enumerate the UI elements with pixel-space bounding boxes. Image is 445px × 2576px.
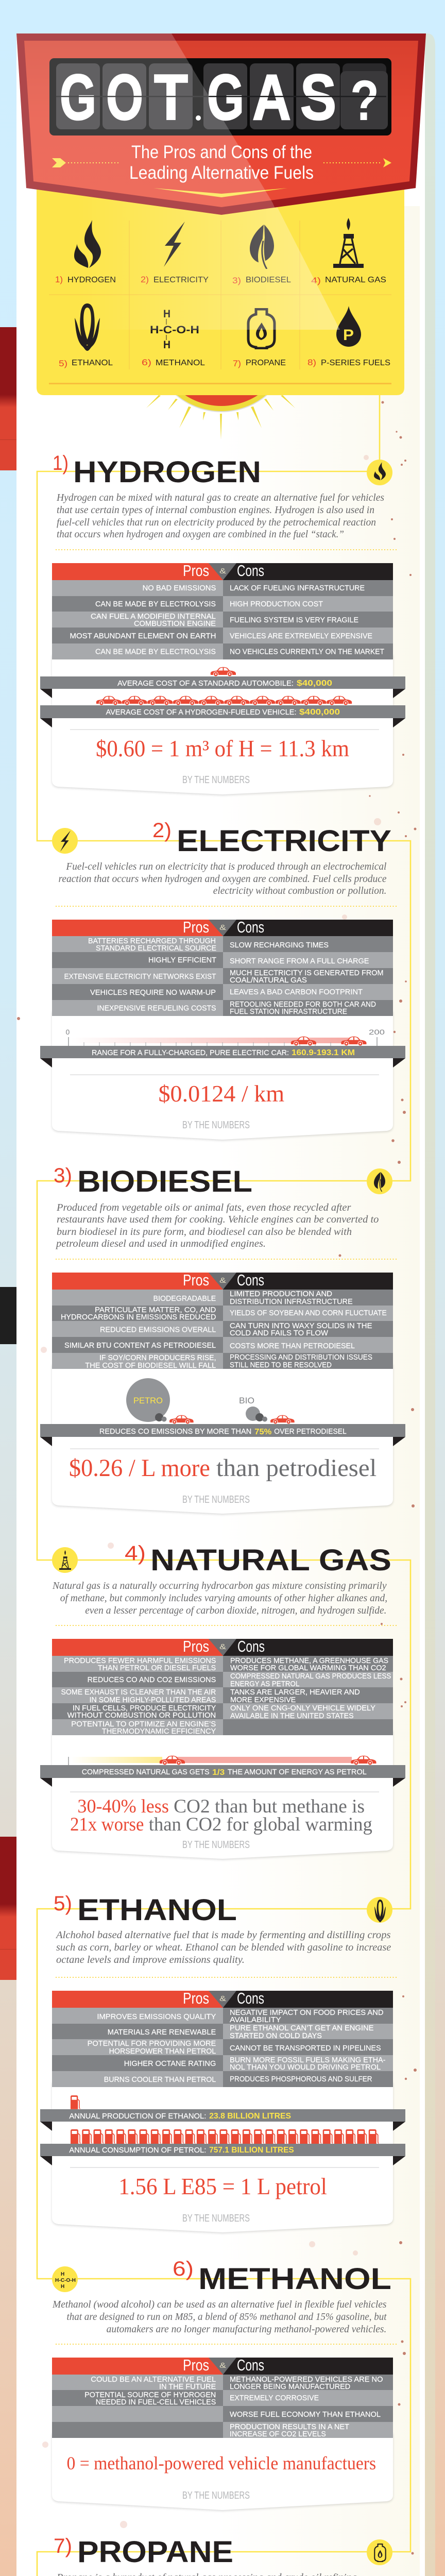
label: natural gas: 4) — [311, 276, 321, 285]
label: ethanol: 5) — [59, 359, 67, 368]
pros and cons table: CAN BE MADE BY ELECTROLYSIS — [95, 600, 216, 608]
label: biodiesel: 3) — [232, 276, 241, 285]
label: methanol: 6) — [142, 358, 151, 367]
pros and cons table: SOME EXHAUST IS CLEANER THAN THE AIR — [61, 1688, 216, 1697]
banner: standard automobile cost: $40,000 — [297, 679, 332, 688]
pros and cons table: SIMILAR BTU CONTENT AS PETRODIESEL — [64, 1342, 216, 1350]
pros and cons table: RETOOLING NEEDED FOR BOTH CAR AND — [230, 1001, 376, 1009]
pros and cons table: IN SOME HIGHLY-POLLUTED AREAS — [90, 1696, 216, 1704]
pros and cons table: PARTICULATE MATTER, CO, AND — [95, 1306, 216, 1314]
pros and cons table: BURN MORE FOSSIL FUELS MAKING ETHA- — [230, 2056, 386, 2064]
pros and cons table: PROCESSING AND DISTRIBUTION ISSUES — [230, 1353, 372, 1362]
energy range chart — [69, 1756, 376, 1765]
description: burn biodiesel in its pure form, and biodiesel can also be blended with — [57, 1226, 352, 1238]
ribbon: left black strip upper — [0, 1287, 16, 1344]
pros and cons table: NEEDED IN FUEL-CELL VEHICLES — [96, 2398, 216, 2406]
heading: ETHANOL — [77, 1893, 237, 1927]
banner: energy: THE AMOUNT OF ENERGY AS PETROL — [228, 1768, 367, 1776]
label: methanol — [142, 358, 205, 367]
description: reaction that occurs when hydrogen and oxygen are combined. Fuel cells produce — [59, 873, 387, 885]
pros and cons table: LIMITED PRODUCTION AND — [230, 1290, 332, 1298]
banner: energy — [40, 1765, 405, 1787]
sign board edge strip — [420, 33, 435, 2576]
pros and cons table: DISTRIBUTION INFRASTRUCTURE — [230, 1298, 353, 1306]
description: Alchohol based alternative fuel that is made by fermenting and distilling crops — [55, 1929, 391, 1941]
banner: hydrogen vehicle cost: $400,000 — [299, 708, 340, 717]
pros and cons table: STARTED ON COLD DAYS — [230, 2032, 322, 2040]
pros and cons table: WITHOUT COMBUSTION OR POLLUTION — [67, 1711, 216, 1720]
big stat: $0.26 / L more — [69, 1454, 210, 1482]
pros and cons table: REDUCES CO AND CO2 EMISSIONS — [88, 1676, 216, 1684]
flip board title — [49, 58, 391, 135]
ribbon: left red strip lower — [0, 1837, 16, 1980]
pros and cons table: & — [219, 1276, 226, 1285]
pros and cons table — [52, 1637, 393, 1736]
heading: 2) — [152, 819, 172, 842]
pros and cons table: AVAILABLE IN THE UNITED STATES — [230, 1712, 354, 1720]
pros and cons table: LONGER BEING MANUFACTURED — [230, 2383, 350, 2391]
pros and cons table: FUEL STATION INFRASTRUCTURE — [230, 1008, 347, 1016]
banner: ethanol production: ANNUAL PRODUCTION OF ETHANOL: — [69, 2112, 206, 2121]
banner: ethanol production — [40, 2109, 405, 2131]
pros and cons table: HIGHLY EFFICIENT — [148, 956, 216, 964]
description: that occurs when hydrogen and oxygen are combined in the fuel “stack.” — [57, 529, 344, 540]
section 5: ethanol — [40, 1892, 405, 2232]
pros and cons table: IN THE FUTURE — [159, 2383, 216, 2391]
big stat: 1.56 L E85 = 1 L petrol — [118, 2173, 327, 2199]
stats card — [52, 1011, 393, 1140]
description: Natural gas is a naturally occurring hydrocarbon gas mixture consisting primarily — [52, 1580, 387, 1591]
banner: range — [40, 1046, 405, 1067]
pros and cons table: INCREASE OF CO2 LEVELS — [230, 2430, 326, 2438]
heading: PROPANE — [77, 2535, 233, 2569]
pros and cons table — [52, 562, 393, 659]
label: propane: PROPANE — [246, 359, 286, 367]
heading: 4) — [125, 1542, 146, 1565]
car icon: standard — [211, 667, 236, 676]
range chart: 200 — [369, 1028, 385, 1036]
emissions bubble chart — [126, 1378, 295, 1424]
pros and cons table: INEXPENSIVE REFUELING COSTS — [97, 1005, 216, 1013]
pros and cons table: BURNS COOLER THAN PETROL — [104, 2076, 216, 2084]
pros and cons table: CANNOT BE TRANSPORTED IN PIPELINES — [230, 2044, 381, 2053]
icon: p-series drop — [336, 306, 361, 347]
heading: 3) — [54, 1164, 72, 1187]
banner: emissions: 75% — [254, 1428, 272, 1436]
label: electricity: 2) — [141, 275, 149, 284]
pros and cons table: LEAVES A BAD CARBON FOOTPRINT — [230, 988, 363, 996]
description: such as corn, barley or wheat. Ethanol can be blended with gasoline to increase — [56, 1942, 391, 1953]
sign glare — [16, 33, 278, 215]
pros and cons table: COMPRESSED NATURAL GAS PRODUCES LESS — [230, 1672, 391, 1681]
big stat: 30-40% less — [77, 1796, 169, 1817]
description: restaurants have used them for cooking. Vehicle engines can be converted to — [57, 1214, 379, 1225]
label: hydrogen: HYDROGEN — [67, 276, 116, 284]
banner: standard automobile cost — [40, 676, 405, 698]
label: ethanol: ETHANOL — [72, 359, 113, 367]
label: hydrogen — [55, 275, 116, 284]
section 1: hydrogen — [40, 452, 405, 794]
pros and cons table: HIGH PRODUCTION COST — [230, 600, 323, 608]
description: of methane, but commonly includes varying amounts of other higher alkanes and, — [60, 1592, 387, 1604]
description — [52, 2299, 387, 2335]
heading: BIODIESEL — [77, 1165, 252, 1198]
icon badge: leaf — [367, 1168, 392, 1194]
car icons: ten cars — [96, 696, 352, 705]
by the numbers label: BY THE NUMBERS — [182, 774, 250, 786]
icon badge: formula: H — [61, 2272, 64, 2277]
description — [55, 1202, 379, 1249]
pros and cons table: NEGATIVE IMPACT ON FOOD PRICES AND — [230, 2009, 384, 2017]
heading: NATURAL GAS — [150, 1544, 391, 1577]
icon: ethanol corn — [75, 303, 100, 351]
pros and cons table: THERMODYNAMIC EFFICIENCY — [102, 1727, 216, 1736]
by the numbers label: BY THE NUMBERS — [182, 2490, 250, 2501]
pros and cons table: Cons — [237, 1271, 264, 1289]
flip board title: T — [154, 62, 188, 133]
heading: 7) — [54, 2535, 72, 2557]
pros and cons table: COLD AND FAILS TO FLOW — [230, 1329, 328, 1337]
flip board title: ? — [350, 69, 379, 132]
icons: row of fuel pumps — [70, 2129, 379, 2144]
icon: hydrogen flame — [74, 220, 101, 268]
right arrow and dots — [323, 158, 391, 167]
section 7: propane — [52, 2535, 397, 2576]
pros and cons table: Pros — [183, 1989, 209, 2007]
big stat: $0.60 = 1 m³ of H = 11.3 km — [96, 735, 349, 761]
banner: emissions: OVER PETRODIESEL — [274, 1428, 347, 1436]
pros and cons table: THE COST OF BIODIESEL WILL FALL — [85, 1362, 216, 1370]
icon: fuel pump — [71, 2095, 80, 2109]
pros and cons table: PRODUCES FEWER HARMFUL EMISSIONS — [64, 1657, 216, 1665]
pros and cons table: MATERIALS ARE RENEWABLE — [108, 2028, 216, 2037]
pros and cons table: LACK OF FUELING INFRASTRUCTURE — [230, 584, 365, 592]
stats card — [52, 1364, 393, 1514]
pros and cons table: YIELDS OF SOYBEAN AND CORN FLUCTUATE — [230, 1309, 387, 1317]
label: propane: 7) — [233, 359, 241, 368]
heading: 6) — [173, 2258, 194, 2280]
icon badge: formula: H — [61, 2284, 64, 2290]
pros and cons table: MUCH ELECTRICITY IS GENERATED FROM — [230, 969, 384, 977]
label: p-series fuels: P-SERIES FUELS — [321, 359, 390, 367]
label: natural gas — [311, 276, 386, 285]
description: Methanol (wood alcohol) can be used as an alternative fuel in flexible fuel vehicles — [52, 2299, 387, 2310]
section 6: methanol — [52, 2258, 397, 2510]
sun motif under menu panel — [146, 271, 295, 439]
banner: energy: 1/3 — [212, 1768, 225, 1777]
big stat: 0 = methanol-powered vehicle manufactuers — [67, 2453, 376, 2473]
banner: range: 160.9-193.1 KM — [292, 1048, 355, 1057]
pros and cons table: MORE EXPENSIVE — [230, 1696, 296, 1704]
pros and cons table: BIODEGRADABLE — [153, 1295, 216, 1303]
pros and cons table: IF SOY/CORN PRODUCERS RISE, — [99, 1354, 216, 1362]
pros and cons table: VEHICLES REQUIRE NO WARM-UP — [90, 989, 216, 997]
pros and cons table: SLOW RECHARGING TIMES — [230, 941, 329, 950]
pros and cons table: COMBUSTION ENGINE — [134, 620, 216, 628]
icon: p-series drop: P — [343, 327, 354, 344]
by the numbers label: BY THE NUMBERS — [182, 1494, 250, 1505]
banner: hydrogen vehicle cost: AVERAGE COST OF A HYDROGEN-FUELED VEHICLE: — [106, 708, 297, 717]
description: automakers are no longer manufacturing methanol-powered vehicles. — [107, 2324, 386, 2335]
description — [59, 861, 387, 896]
banner: ethanol production: 23.8 BILLION LITRES — [209, 2112, 291, 2121]
label: p-series fuels: 8) — [307, 358, 316, 367]
description: octane levels and improve emissions quality. — [56, 1954, 245, 1965]
big stat: than petrodiesel — [216, 1454, 376, 1482]
description: petroleum diesel and used in unmodified engines. — [55, 1238, 266, 1249]
pros and cons table: Pros — [183, 562, 209, 580]
big stat — [69, 1454, 376, 1482]
description — [55, 1929, 391, 1965]
label: propane — [233, 359, 286, 368]
pros and cons table: WORSE FOR GLOBAL WARMING THAN CO2 — [230, 1664, 386, 1672]
flip board title: S — [300, 62, 336, 133]
pros and cons table: ENERGY AS PETROL — [230, 1680, 299, 1688]
pros and cons table — [52, 1271, 393, 1370]
pros and cons table: Cons — [237, 1637, 265, 1655]
banner: energy: COMPRESSED NATURAL GAS GETS — [82, 1768, 210, 1776]
pros and cons table: PRODUCTION RESULTS IN A NET — [230, 2423, 349, 2431]
pros and cons table: TANKS ARE LARGER, HEAVIER AND — [230, 1688, 360, 1697]
pros and cons table: Pros — [183, 1637, 209, 1655]
icon: natural gas rig — [333, 218, 364, 268]
pros and cons table — [52, 1989, 393, 2087]
icon badge: tank — [367, 2539, 392, 2565]
pros and cons table: CAN BE MADE BY ELECTROLYSIS — [95, 648, 216, 656]
pros and cons table: POTENTIAL TO OPTIMIZE AN ENGINE’S — [71, 1720, 216, 1728]
pros and cons table: NOL THAN YOU WOULD DRIVING PETROL — [230, 2063, 381, 2072]
pros and cons table: EXTREMELY CORROSIVE — [230, 2394, 319, 2402]
by the numbers label: BY THE NUMBERS — [182, 1120, 250, 1131]
icon badge: formula: H-C-O-H — [55, 2278, 76, 2283]
stats card — [52, 654, 393, 794]
banner: petrol consumption — [40, 2144, 405, 2165]
section 3: biodiesel — [40, 1164, 405, 1514]
pros and cons table: ONLY ONE CNG-ONLY VEHICLE WIDELY — [230, 1704, 375, 1713]
flip board title: A — [252, 62, 291, 133]
pros and cons table: STANDARD ELECTRICAL SOURCE — [96, 944, 216, 953]
pros and cons table: COSTS MORE THAN PETRODIESEL — [230, 1342, 355, 1350]
pros and cons table: COAL/NATURAL GAS — [230, 976, 307, 985]
pros and cons table: METHANOL-POWERED VEHICLES ARE NO — [230, 2376, 383, 2384]
heading: 5) — [54, 1892, 72, 1915]
icon badge: flame — [367, 460, 392, 485]
description: Produced from vegetable oils or animal fats, even those recycled after — [56, 1202, 351, 1213]
pros and cons table: Pros — [183, 2356, 209, 2374]
pros and cons table: & — [219, 567, 226, 575]
emissions bubble chart: BIO — [239, 1396, 254, 1405]
banner: emissions — [40, 1424, 405, 1446]
pale paper stains — [41, 455, 381, 2576]
swoosh — [153, 188, 287, 197]
big stat: 21x worse — [70, 1814, 144, 1835]
pros and cons table: Pros — [183, 1271, 209, 1289]
panel: fuel menu — [37, 185, 404, 395]
connecting yellow rail line — [37, 395, 410, 2576]
pros and cons table: MOST ABUNDANT ELEMENT ON EARTH — [70, 632, 216, 640]
heading: HYDROGEN — [73, 455, 261, 489]
pros and cons table: COULD BE AN ALTERNATIVE FUEL — [91, 2376, 216, 2384]
header sign — [16, 33, 426, 215]
pros and cons table: CAN FUEL A MODIFIED INTERNAL — [91, 613, 216, 621]
panel glare — [37, 190, 340, 330]
subtitle: Leading Alternative Fuels — [129, 163, 314, 183]
label: biodiesel — [232, 276, 291, 285]
pros and cons table: THAN PETROL OR DIESEL FUELS — [98, 1664, 216, 1672]
pros and cons table — [52, 2356, 393, 2438]
pros and cons table: IMPROVES EMISSIONS QUALITY — [97, 2013, 216, 2021]
icon: propane tank — [248, 309, 275, 348]
icon: methanol formula: H — [163, 339, 170, 351]
big stat — [70, 1796, 372, 1835]
banner: petrol consumption: 757.1 BILLION LITRES — [209, 2146, 294, 2155]
heading — [173, 2258, 391, 2296]
stats card — [52, 1730, 393, 1859]
description: that use certain types of internal combustion engines. Hydrogen is also used in — [57, 504, 374, 516]
big stat: $0.0124 / km — [159, 1080, 284, 1107]
stats card — [52, 2082, 393, 2232]
icon badge: rig — [52, 1547, 78, 1573]
pros and cons table: PURE ETHANOL CAN’T GET AN ENGINE — [230, 2024, 374, 2032]
banner: range: RANGE FOR A FULLY-CHARGED, PURE ELECTRIC CAR: — [92, 1049, 289, 1057]
range chart: 0 — [66, 1028, 70, 1036]
icon: biodiesel leaf — [250, 225, 274, 269]
pros and cons table: POTENTIAL FOR PROVIDING MORE — [88, 2040, 216, 2048]
pros and cons table: PRODUCES METHANE, A GREENHOUSE GAS — [230, 1657, 388, 1665]
label: electricity — [141, 275, 209, 284]
pros and cons table: EXTENSIVE ELECTRICITY NETWORKS EXIST — [64, 973, 216, 981]
icon: electricity bolt — [164, 222, 185, 267]
by the numbers label: BY THE NUMBERS — [182, 2213, 250, 2224]
stats card — [52, 2433, 393, 2510]
pros and cons table: HORSEPOWER THAN PETROL — [109, 2047, 216, 2056]
description: fuel-cell vehicles that run on electricity produced by the petrochemical reaction — [57, 517, 376, 528]
flip board title: G — [207, 62, 244, 133]
pros and cons table: SHORT RANGE FROM A FULL CHARGE — [230, 957, 369, 965]
subtitle: The Pros and Cons of the — [131, 142, 312, 162]
label: methanol: METHANOL — [156, 359, 205, 367]
paper speckles — [17, 401, 417, 2576]
pros and cons table: Cons — [237, 918, 264, 936]
label: ethanol — [59, 359, 113, 368]
pros and cons table: & — [219, 2361, 226, 2370]
heading: 1) — [53, 452, 69, 474]
pros and cons table: NO BAD EMISSIONS — [143, 584, 216, 592]
left chevron and dots — [52, 158, 119, 167]
description: electricity without combustion or pollution. — [213, 885, 386, 896]
banner: standard automobile cost: AVERAGE COST OF A STANDARD AUTOMOBILE: — [117, 680, 294, 688]
label: biodiesel: BIODIESEL — [246, 276, 291, 284]
pros and cons table — [52, 918, 393, 1016]
heading: ELECTRICITY — [177, 824, 391, 858]
label: natural gas: NATURAL GAS — [325, 276, 386, 284]
emissions bubble chart: PETRO — [133, 1396, 163, 1405]
pros and cons table: Cons — [237, 1989, 264, 2007]
pros and cons table: & — [219, 1642, 226, 1651]
banner: petrol consumption: ANNUAL CONSUMPTION OF PETROL: — [69, 2146, 206, 2155]
big stat: than CO2 for global warming — [149, 1814, 372, 1835]
pros and cons table: & — [219, 1994, 226, 2003]
by the numbers label: BY THE NUMBERS — [182, 1839, 250, 1851]
pros and cons table: FUELING SYSTEM IS VERY FRAGILE — [230, 616, 358, 624]
description — [52, 1580, 387, 1616]
pros and cons table: CAN TURN INTO WAXY SOLIDS IN THE — [230, 1322, 372, 1330]
subtitle — [129, 142, 314, 183]
description: Fuel-cell vehicles run on electricity that is produced through an electrochemical — [65, 861, 387, 872]
pros and cons table: & — [219, 923, 226, 932]
pros and cons table: WORSE FUEL ECONOMY THAN ETHANOL — [230, 2411, 381, 2419]
pros and cons table: STILL NEED TO BE RESOLVED — [230, 1361, 332, 1369]
ribbon: left red strip upper — [0, 327, 16, 470]
label: hydrogen: 1) — [55, 275, 63, 284]
pros and cons table: Cons — [237, 2356, 264, 2374]
flip board title: O — [106, 62, 143, 133]
icon: methanol formula — [150, 308, 199, 351]
icon badge: bolt — [52, 828, 78, 854]
description: that are designed to run on M85, a blend of 85% methanol and 15% gasoline, but — [67, 2311, 387, 2323]
pros and cons table: VEHICLES ARE EXTREMELY EXPENSIVE — [230, 632, 372, 640]
pros and cons table: REDUCED EMISSIONS OVERALL — [100, 1326, 216, 1334]
label: electricity: ELECTRICITY — [153, 276, 209, 284]
heading: METHANOL — [198, 2262, 391, 2296]
pros and cons table: HIGHER OCTANE RATING — [124, 2060, 216, 2068]
flip board title: G — [60, 62, 96, 133]
pros and cons table: Cons — [237, 562, 264, 580]
icon: methanol formula: H — [163, 308, 170, 320]
range chart — [66, 1028, 385, 1046]
icon badge: formula — [52, 2266, 78, 2292]
pros and cons table: Pros — [183, 918, 209, 936]
pros and cons table: NO VEHICLES CURRENTLY ON THE MARKET — [230, 648, 384, 656]
pros and cons table: IN FUEL CELLS, PRODUCE ELECTRICITY — [73, 1704, 216, 1713]
section 4: natural gas — [40, 1542, 405, 1859]
pros and cons table: POTENTIAL SOURCE OF HYDROGEN — [84, 2391, 216, 2399]
pros and cons table: BATTERIES RECHARGED THROUGH — [88, 937, 216, 945]
banner: emissions: REDUCES CO EMISSIONS BY MORE THAN — [99, 1428, 251, 1436]
pros and cons table: AVAILABILITY — [230, 2016, 281, 2024]
description: Hydrogen can be mixed with natural gas to create an alternative fuel for vehicles — [56, 492, 384, 503]
pros and cons table: HYDROCARBONS IN EMISSIONS REDUCED — [61, 1313, 216, 1321]
pros and cons table: PRODUCES PHOSPHOROUS AND SULFER — [230, 2075, 372, 2083]
description: even a lesser percentage of carbon dioxide, nitrogen, and hydrogen sulfide. — [85, 1605, 387, 1616]
banner: hydrogen vehicle cost — [40, 705, 405, 727]
icon: methanol formula: H-C-O-H — [150, 324, 199, 336]
description — [56, 492, 384, 540]
icon badge: corn — [367, 1897, 392, 1923]
big stat: CO2 than but methane is — [174, 1796, 365, 1817]
section 2: electricity — [40, 819, 405, 1140]
